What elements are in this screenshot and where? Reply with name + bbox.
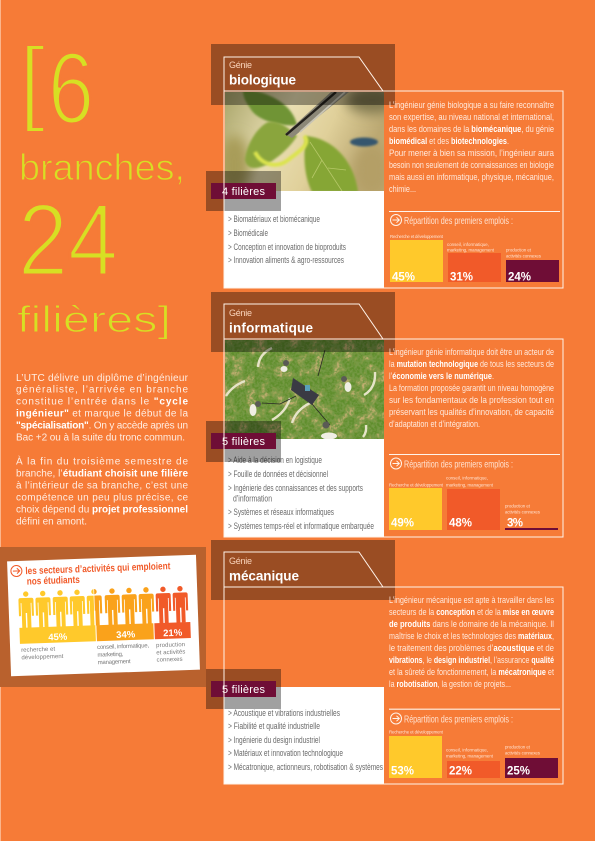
tag: 4 filières: 4 filières xyxy=(222,186,266,198)
heading: Génie xyxy=(229,556,252,566)
tag: 5 filières: 5 filières xyxy=(222,684,266,696)
chart: répartition biologique: production et xyxy=(506,248,532,252)
sector heading: les secteurs d’activités qui emploient xyxy=(25,561,171,577)
filières list: > Biomédicale xyxy=(228,228,268,238)
description: le traitement des problèmes d’acoustique et de xyxy=(389,642,554,653)
chart: répartition biologique: Recherche et développement xyxy=(390,234,444,239)
description: son expertise, au niveau national et international, xyxy=(389,111,554,122)
filières list: > Innovation aliments & agro-ressources xyxy=(228,255,344,265)
description: biomédical et des biotechnologies. xyxy=(389,135,509,146)
icon: arrow xyxy=(390,713,402,724)
chart: répartition mécanique: Recherche et développement xyxy=(389,730,444,734)
filières list xyxy=(228,455,374,531)
filières list: > Systèmes temps-réel et informatique embarquée xyxy=(228,521,374,531)
description: de produits dans le domaine de la mécanique. Il xyxy=(389,618,554,629)
filières list: > Acoustique et vibrations industrielles xyxy=(228,708,340,718)
title: branches, xyxy=(19,147,185,188)
bar: 45% xyxy=(19,625,96,644)
tag shadow xyxy=(206,421,281,462)
description: et la sûreté de fonctionnement, la mécatronique et xyxy=(389,666,554,677)
header shadow xyxy=(211,44,395,105)
chart: répartition informatique: production et xyxy=(505,504,531,509)
chart: répartition biologique: activités connexes xyxy=(506,254,542,258)
chart: répartition informatique xyxy=(389,454,560,530)
filières list: > Conception et innovation de bioproduits xyxy=(228,242,346,252)
chart: répartition informatique: Répartition des premiers emplois : xyxy=(404,460,513,470)
description: l’économie vers le numérique. xyxy=(389,370,494,381)
photo: plant and tweezers xyxy=(225,92,384,191)
filières list: > Systèmes et réseaux informatiques xyxy=(228,507,334,517)
filières list: > Fouille de données et décisionnel xyxy=(228,469,328,479)
bar: 45%: 45% xyxy=(48,632,68,643)
bar: 21%: 21% xyxy=(163,628,183,639)
sector labels: conseil, informatique, xyxy=(97,643,150,651)
sector labels: et activités xyxy=(156,649,185,656)
description: préservant les qualités d’innovation, de capacité xyxy=(389,406,554,417)
filières list: > Mécatronique, actionneurs, robotisation & systèmes xyxy=(228,762,383,772)
intro text: L’UTC délivre un diplôme d’ingénieur xyxy=(16,373,189,384)
description: sur les fondamentaux de la profession tout en xyxy=(389,394,554,405)
title: 24 xyxy=(18,183,118,297)
intro text: à l’intérieur de sa branche, c’est une xyxy=(16,480,188,492)
description: d’adaptation et d’intégration. xyxy=(389,418,480,429)
chart: répartition biologique: Répartition des premiers emplois : xyxy=(404,216,513,227)
heading: mécanique xyxy=(229,568,299,584)
tag: 5 filières xyxy=(211,681,276,697)
filières list: > Aide à la décision en logistique xyxy=(228,455,322,465)
bar: 34% xyxy=(96,623,154,642)
sector labels: connexes xyxy=(157,657,183,664)
filières list: > Ingénierie du design industriel xyxy=(228,735,320,745)
intro text xyxy=(16,373,189,528)
tag shadow xyxy=(206,669,281,709)
intro text: Bac +2 ou à la suite du tronc commun. xyxy=(16,432,185,444)
description: mais aussi en informatique, physique, mécanique, xyxy=(389,171,554,182)
header outline xyxy=(224,552,563,784)
description xyxy=(389,594,554,689)
icon: arrow xyxy=(11,565,22,577)
chart: répartition informatique: activités connexes xyxy=(505,510,541,515)
chart: répartition informatique: 48% xyxy=(449,518,472,530)
panel: génie mécanique xyxy=(206,540,563,784)
header shadow xyxy=(211,292,395,352)
sector heading xyxy=(25,561,171,588)
header outline xyxy=(224,57,563,288)
header shadow xyxy=(211,540,395,600)
description: la robotisation, la gestion de projets... xyxy=(389,678,511,689)
tag: 5 filières xyxy=(211,433,276,449)
tag: 4 filières xyxy=(211,183,276,199)
header outline xyxy=(224,304,563,537)
white filières panel xyxy=(224,191,384,288)
panel: génie biologique xyxy=(206,44,563,288)
description: L’ingénieur génie biologique a su faire reconnaître xyxy=(389,99,554,110)
pictogram: people xyxy=(18,586,189,628)
chart: répartition mécanique: Répartition des premiers emplois : xyxy=(404,714,513,726)
description: la mutation technologique de tous les secteurs de xyxy=(389,358,554,369)
chart: répartition mécanique: production et xyxy=(505,744,531,750)
intro text: constitue l’entrée dans le "cycle xyxy=(16,396,188,408)
tag shadow xyxy=(206,171,281,211)
icon: arrow xyxy=(390,214,402,226)
sector labels: production xyxy=(156,642,185,649)
chart: répartition biologique: 24% xyxy=(508,272,531,284)
photo: sensor on grass xyxy=(225,340,384,440)
tag: 5 filières: 5 filières xyxy=(222,436,266,448)
chart: répartition biologique: 31% xyxy=(450,272,473,284)
intro text: compétence un peu plus précise, ce xyxy=(16,492,188,504)
heading xyxy=(229,60,296,88)
heading: informatique xyxy=(229,320,313,336)
sector labels: recherche et xyxy=(21,647,56,654)
sector labels: marketing, xyxy=(97,652,124,659)
bar: 21% xyxy=(154,622,191,640)
intro text: branche, l’étudiant choisit une filière xyxy=(16,468,188,480)
panel: génie informatique xyxy=(206,292,563,537)
chart: répartition mécanique: conseil, informatique, xyxy=(446,748,488,753)
icon: arrow xyxy=(390,458,402,469)
chart: répartition mécanique: marketing, management xyxy=(446,754,494,758)
filières list xyxy=(228,708,383,772)
sector heading: nos étudiants xyxy=(27,575,80,588)
chart: répartition informatique: Recherche et développement xyxy=(389,482,444,488)
sector card xyxy=(7,555,200,676)
filières list xyxy=(228,214,346,265)
chart: répartition informatique: conseil, informatique, xyxy=(446,476,488,481)
description: dans les domaines de la biomécanique, du génie xyxy=(389,123,554,134)
intro text: choix dépend du projet professionnel xyxy=(16,504,188,516)
filières list: > Matériaux et innovation technologique xyxy=(228,748,343,758)
intro text: généraliste, l’arrivée en branche xyxy=(16,384,188,396)
description: vibrations, le design industriel, l’assurance qualité xyxy=(389,654,554,665)
intro text: À la fin du troisième semestre de xyxy=(16,454,188,468)
sector labels xyxy=(21,642,186,669)
heading: Génie xyxy=(229,308,252,318)
title xyxy=(17,28,185,340)
title: filières] xyxy=(17,299,171,340)
chart: répartition mécanique: activités connexes xyxy=(505,751,541,756)
filières list: > Fiabilité et qualité industrielle xyxy=(228,721,320,731)
chart: répartition informatique: marketing, management xyxy=(446,483,494,488)
white filières panel xyxy=(224,687,384,784)
heading: Génie xyxy=(229,60,252,70)
title: [ xyxy=(19,28,45,134)
description: maîtrise le choix et les technologies des matériaux, xyxy=(389,630,554,641)
chart: répartition mécanique: 25% xyxy=(507,766,530,778)
intro text: "spécialisation". On y accède après un xyxy=(16,420,188,432)
heading: biologique xyxy=(229,72,296,88)
description: secteurs de la conception et de la mise en œuvre xyxy=(389,606,554,617)
chart: répartition informatique: 49% xyxy=(391,518,414,530)
bar: 34%: 34% xyxy=(116,629,136,641)
chart: répartition biologique: conseil, informatique, xyxy=(447,242,489,247)
filières list: > Biomatériaux et biomécanique xyxy=(228,214,320,224)
heading xyxy=(229,308,313,336)
chart: répartition biologique: 45% xyxy=(392,272,415,284)
panel: secteurs d'activités xyxy=(0,547,206,687)
chart: répartition biologique: marketing, management xyxy=(447,248,495,252)
filières list: > Ingénierie des connaissances et des supports xyxy=(228,483,363,493)
chart: répartition mécanique: 53% xyxy=(391,766,414,778)
white filières panel xyxy=(224,439,384,537)
intro text: ingénieur" et marque le début de la xyxy=(16,408,188,420)
description xyxy=(389,99,555,194)
chart: répartition informatique: 3% xyxy=(507,518,523,530)
title: 6 xyxy=(48,33,94,145)
chart: répartition mécanique xyxy=(389,708,560,778)
description xyxy=(389,346,554,429)
chart: répartition mécanique: 22% xyxy=(449,766,472,778)
sector labels: développement xyxy=(21,654,64,661)
chart: répartition biologique xyxy=(389,211,560,284)
sector labels: management xyxy=(98,659,131,666)
heading xyxy=(229,556,299,584)
description: Pour mener à bien sa mission, l’ingénieur aura xyxy=(389,147,555,158)
description: chimie... xyxy=(389,183,416,194)
intro text: défini en amont. xyxy=(16,516,87,528)
filières list: d’information xyxy=(233,494,272,504)
